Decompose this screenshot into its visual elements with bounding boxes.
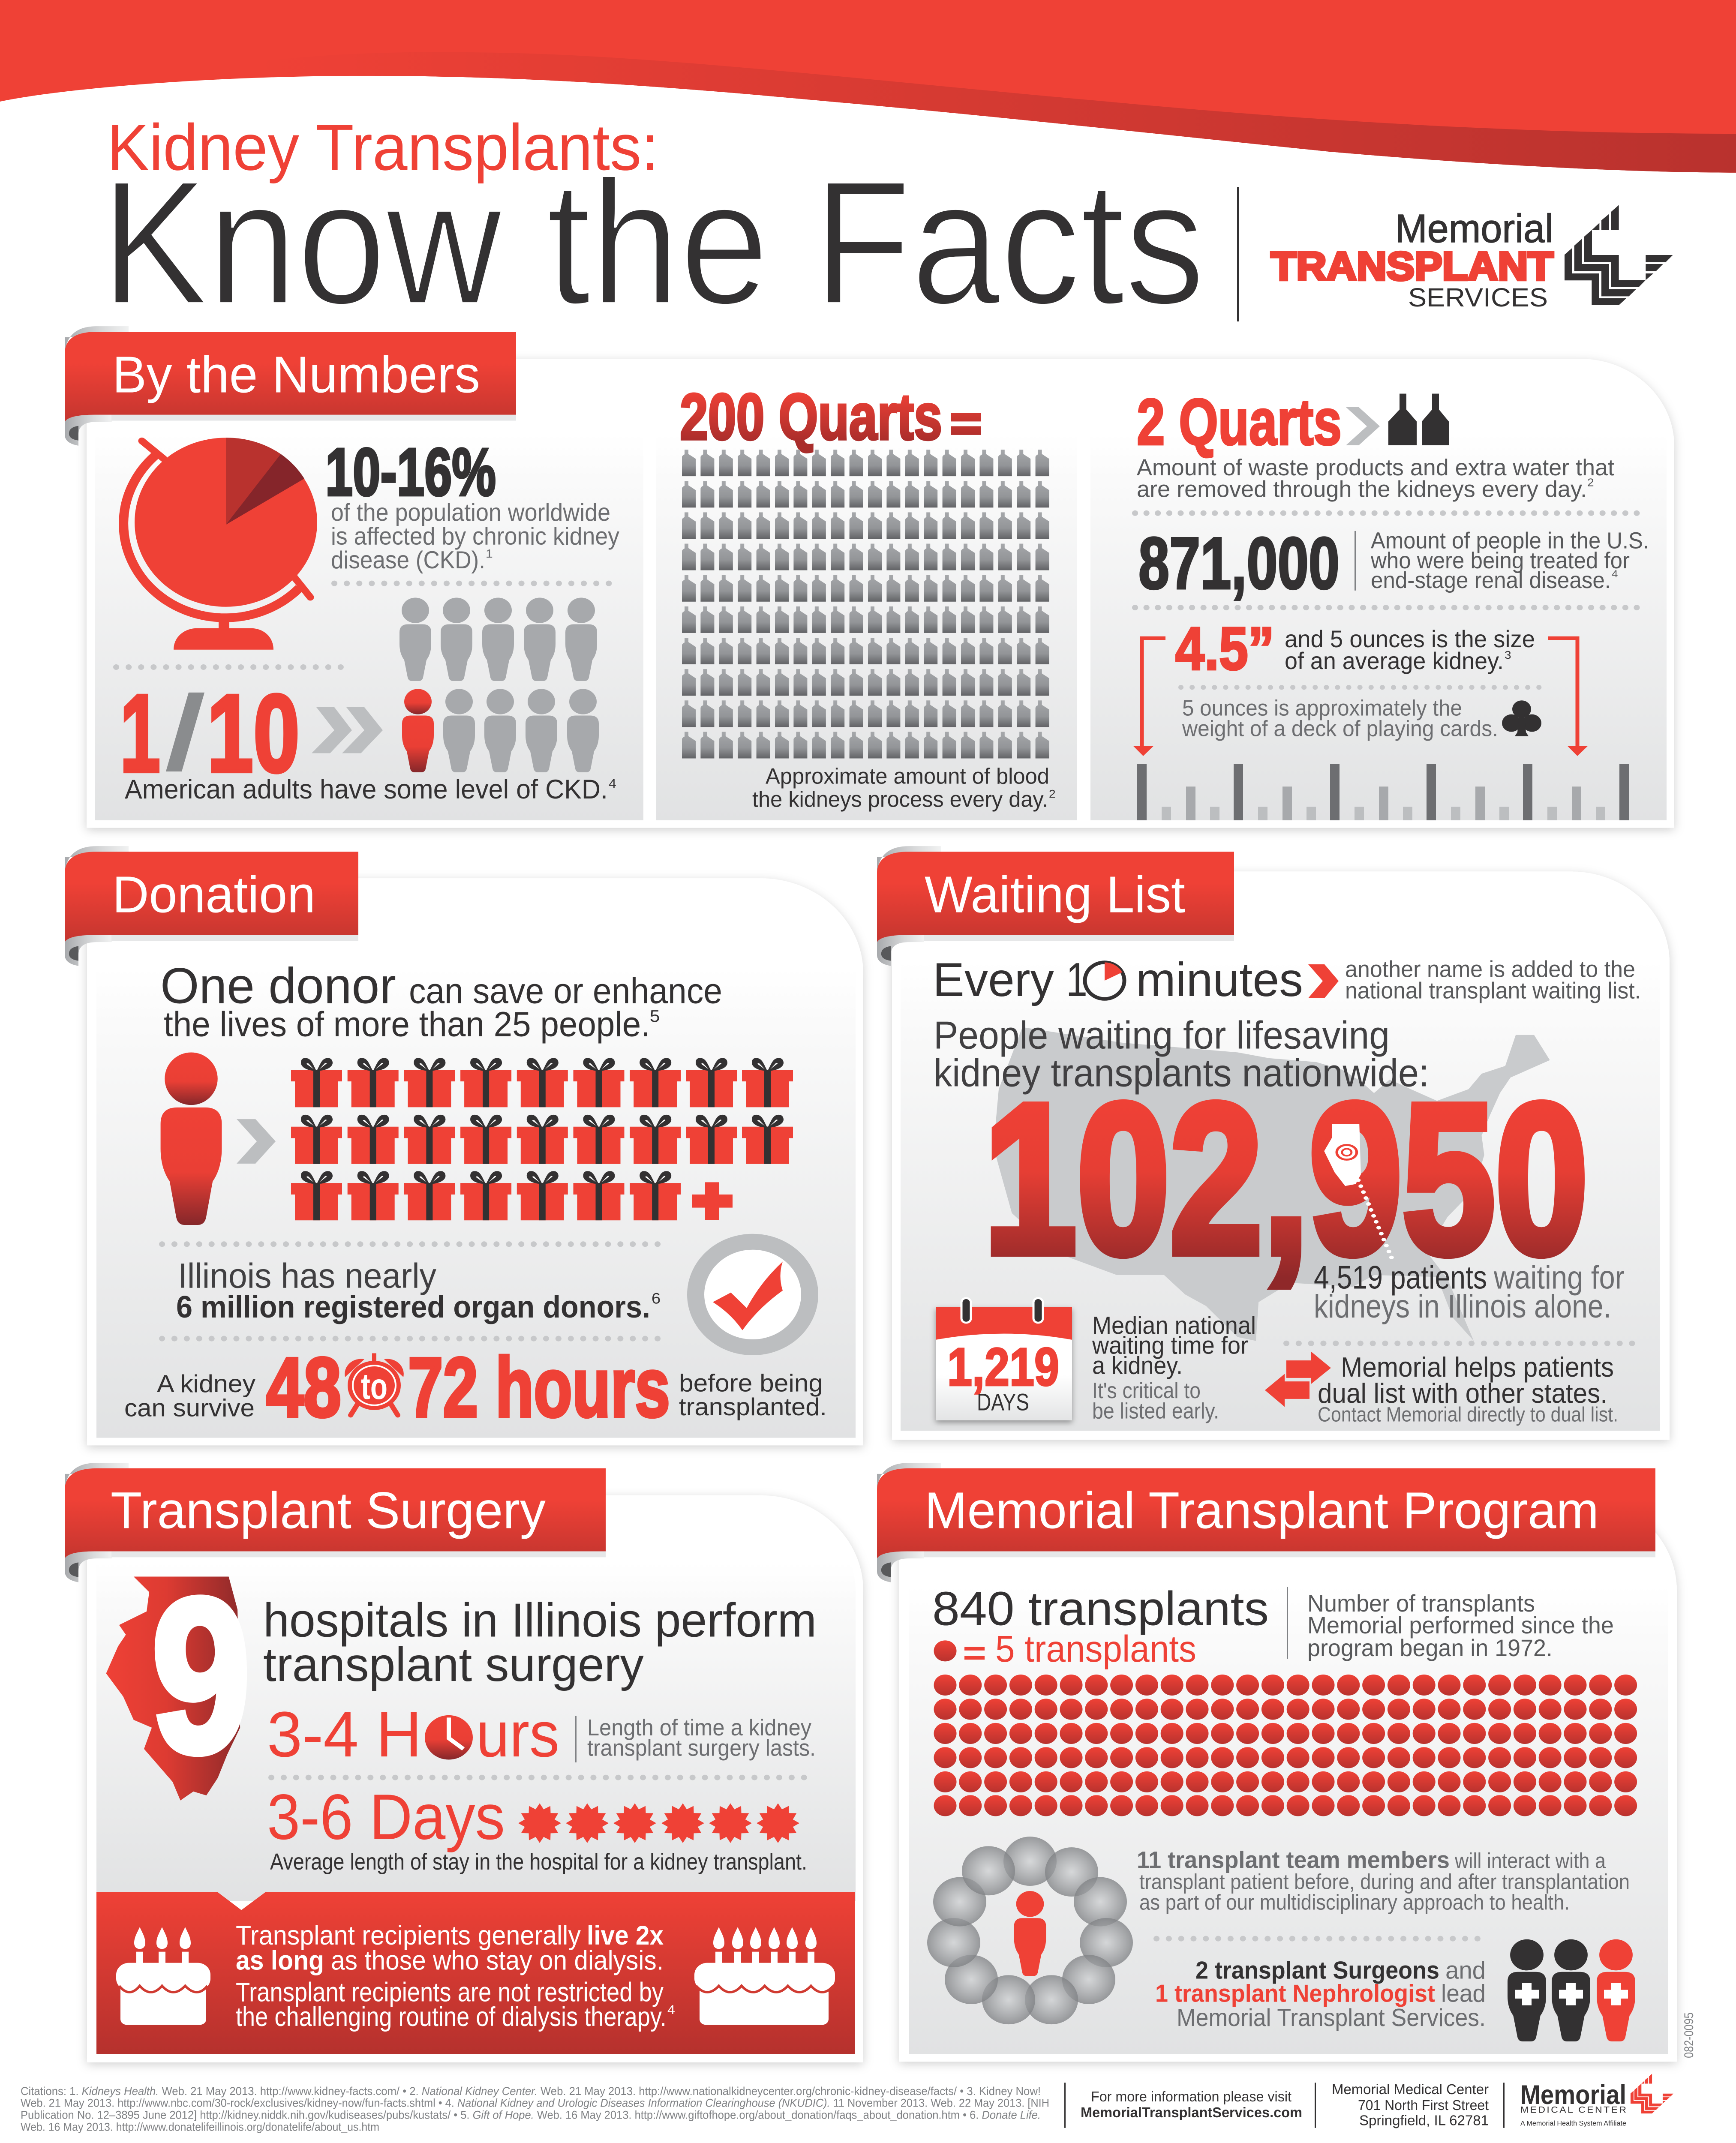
heading: 2 quarts: 2 Quarts <box>1137 385 1342 459</box>
arrow: bracket lines <box>1142 638 1577 748</box>
footer: address: Memorial Medical Center <box>1332 2082 1489 2098</box>
icon: alarm clock: to <box>361 1366 387 1407</box>
stat: 4.5 inches: 4.5” <box>1175 615 1274 683</box>
text: a kidney can survive: can survive <box>124 1394 255 1422</box>
text: one donor: can save or enhance <box>409 971 722 1011</box>
text: dual listing: dual list with other states. <box>1318 1378 1607 1409</box>
footer logo: memorial medical center: MEDICAL CENTER <box>1520 2104 1626 2115</box>
text: team members: transplant patient before, during and after transplantation <box>1139 1870 1630 1894</box>
text: blood processed: Approximate amount of blood <box>766 764 1049 789</box>
icon grid: 168 dots <box>934 1675 1637 1816</box>
text: before being transplanted <box>679 1369 827 1420</box>
icon: check mark <box>696 1242 810 1348</box>
text: median waiting time: be listed early. <box>1092 1399 1219 1423</box>
text: every 10 minutes: Every <box>933 953 1054 1006</box>
ruler <box>1137 764 1629 820</box>
icon: calendar <box>936 1298 1072 1420</box>
text: team members: will interact with a <box>1454 1849 1606 1873</box>
logo: memorial transplant services <box>1271 205 1673 312</box>
text: population affected: is affected by chronic kidney <box>331 522 619 550</box>
text: another name <box>1345 956 1641 1003</box>
text: recipients: Transplant recipients generally <box>236 1920 581 1950</box>
text: kidney size: 3 <box>1505 649 1511 661</box>
icon grid: gifts <box>291 1058 793 1220</box>
icon: calendar: 1,219 <box>947 1337 1059 1397</box>
text: illinois donors: 6 million registered organ donors. <box>176 1290 650 1324</box>
citations: Web. 21 May 2013. http://www.nbc.com/30-rock/exclusives/kidney-now/fun-facts.shtml • 4. National Kidney and Urologic Diseases Information Clearinghouse (NKUDIC). 11 November 2013. Web. 22 May 2013. [NIH <box>21 2097 1049 2110</box>
text: people treated: Amount of people in the U.S. <box>1371 528 1649 553</box>
text: median waiting time: a kidney. <box>1092 1352 1183 1379</box>
text: people waiting <box>934 1014 1429 1095</box>
ribbon: memorial transplant program <box>877 1463 1655 1582</box>
icon: large cake <box>694 1927 835 2025</box>
text: one donor: the lives of more than 25 people. <box>164 1005 650 1044</box>
text: every 10 minutes <box>933 953 1303 1006</box>
text: dual listing: Contact Memorial directly to dual list. <box>1318 1403 1618 1426</box>
text: surgery length <box>587 1714 816 1761</box>
title: kidney transplants: Kidney Transplants: <box>107 111 659 184</box>
text: illinois patients: 4,519 patients <box>1314 1259 1487 1296</box>
text: population affected: of the population worldwide <box>331 498 610 526</box>
text: american adults: 4 <box>609 776 616 791</box>
stat: 3-4 hours: urs <box>476 1699 559 1771</box>
icon: clock as zero <box>1085 962 1124 999</box>
text: deck of cards: weight of a deck of playing cards. <box>1182 716 1498 741</box>
text: team members: 11 transplant team members <box>1137 1847 1450 1873</box>
section: globe and CKD statistics <box>95 366 643 820</box>
section: 200 quarts <box>656 366 1077 820</box>
text: recipients: as those who stay on dialysis. <box>331 1945 664 1975</box>
panel: by the numbers <box>65 326 1674 828</box>
panel: memorial transplant program <box>877 1463 1677 2062</box>
text: another name: another name is added to the <box>1345 956 1635 982</box>
text: illinois patients: kidneys in Illinois alone. <box>1314 1288 1611 1324</box>
text: surgeons and nephrologist: 2 transplant Surgeons <box>1195 1957 1439 1984</box>
icon: dual list arrows <box>1265 1352 1331 1407</box>
stat: 3-6 days: 3-6 Days <box>267 1781 505 1853</box>
footer logo: memorial medical center: Memorial <box>1520 2080 1626 2110</box>
text: number of transplants <box>1307 1591 1614 1661</box>
panel: waiting list <box>877 846 1670 1440</box>
text: number of transplants: Number of transplants <box>1307 1591 1535 1617</box>
text: median waiting time <box>1092 1312 1256 1423</box>
icon: chevron <box>237 1119 276 1164</box>
text: blood processed: the kidneys process every day. <box>752 787 1048 812</box>
ribbon: donation <box>65 846 358 966</box>
text: another name: national transplant waiting list. <box>1345 978 1641 1003</box>
legend: dot equals 5 transplants: 5 transplants <box>995 1628 1196 1670</box>
text: before being transplanted: transplanted. <box>679 1393 827 1420</box>
icon: six bursts <box>518 1803 799 1843</box>
text: average stay: Average length of stay in the hospital for a kidney transplant. <box>270 1849 807 1875</box>
icon: illinois with number 9: 9 <box>152 1554 250 1798</box>
stat: 840 transplants: 840 transplants <box>932 1582 1269 1636</box>
stat: 871,000: 871,000 <box>1138 522 1340 604</box>
text: a kidney can survive <box>124 1370 255 1422</box>
text: kidney size <box>1285 626 1535 675</box>
stat: 3-4 hours <box>267 1699 559 1771</box>
footer: address: 701 North First Street <box>1358 2098 1489 2113</box>
text: recipients <box>236 1920 675 2032</box>
logo: memorial transplant services: SERVICES <box>1408 283 1548 312</box>
text: population affected <box>331 498 619 573</box>
stat: 48 to 72 hours: 48 <box>266 1341 341 1435</box>
text: one donor: One donor <box>160 957 396 1014</box>
text: people treated: 4 <box>1612 568 1618 580</box>
footer: address: Springfield, IL 62781 <box>1359 2113 1489 2128</box>
text: median waiting time: waiting time for <box>1092 1331 1248 1359</box>
text: blood processed <box>752 764 1056 812</box>
text: median waiting time: Median national <box>1092 1312 1256 1339</box>
legend: dot equals 5 transplants <box>934 1628 1196 1670</box>
icon: team ring around patient <box>927 1837 1133 2024</box>
text: people treated <box>1370 528 1649 593</box>
stat: 10-16%: 10-16% <box>325 434 496 510</box>
text: illinois donors <box>176 1256 661 1324</box>
text: people waiting: kidney transplants nationwide: <box>934 1052 1429 1095</box>
text: median waiting time: It's critical to <box>1092 1378 1201 1403</box>
ribbon: by the numbers <box>65 326 516 446</box>
text: waste products: are removed through the kidneys every day. <box>1137 476 1587 502</box>
logo: memorial transplant services: Memorial <box>1395 207 1553 251</box>
text: waste products <box>1137 454 1614 502</box>
text: surgeons and nephrologist: 1 transplant Nephrologist <box>1155 1979 1435 2007</box>
text: population affected: 1 <box>486 547 493 561</box>
logo: memorial transplant services: TRANSPLANT <box>1271 244 1553 288</box>
ribbon: donation: Donation <box>112 866 315 924</box>
icon grid: bottles <box>682 450 1049 758</box>
text: surgeons and nephrologist <box>1155 1957 1486 2031</box>
icon: red chevron <box>1308 964 1339 998</box>
section: 2 quarts and kidney size <box>1090 366 1667 820</box>
text: deck of cards <box>1182 696 1498 741</box>
text: waste products: Amount of waste products and extra water that <box>1137 454 1614 480</box>
ribbon: memorial transplant program: Memorial Transplant Program <box>925 1482 1599 1540</box>
text: surgery length: Length of time a kidney <box>587 1714 811 1741</box>
text: recipients: live 2x <box>587 1920 664 1950</box>
text: kidney size: and 5 ounces is the size <box>1285 626 1535 653</box>
stat: 3-4 hours: 3-4 H <box>267 1699 422 1771</box>
text: dual listing: Memorial helps patients <box>1341 1352 1614 1383</box>
text: surgery length: transplant surgery lasts. <box>587 1735 816 1761</box>
text: hospitals: hospitals in Illinois perform <box>263 1594 817 1647</box>
text: dual listing <box>1318 1352 1618 1426</box>
icon: small cake <box>116 1927 210 2025</box>
text: hospitals: transplant surgery <box>263 1638 644 1691</box>
title: know the facts: Know the Facts <box>101 144 1205 341</box>
icon: globe <box>123 438 317 650</box>
text: recipients: as long <box>236 1945 324 1975</box>
text: recipients: Transplant recipients are not restricted by <box>236 1977 664 2007</box>
ribbon: transplant surgery <box>65 1463 606 1582</box>
text: waste products: 2 <box>1587 476 1594 489</box>
text: people treated: end-stage renal disease. <box>1371 567 1611 593</box>
ribbon: by the numbers: By the Numbers <box>112 346 480 404</box>
icon: illinois marker <box>1324 1124 1392 1260</box>
text: team members: as part of our multidisciplinary approach to health. <box>1139 1891 1570 1915</box>
text: number of transplants: program began in 1972. <box>1307 1635 1553 1661</box>
icon: two bottles <box>1388 394 1449 445</box>
text: team members <box>1137 1847 1630 1915</box>
text: surgeons and nephrologist: and <box>1445 1957 1486 1984</box>
stat: 48 to 72 hours <box>266 1341 670 1435</box>
heading: 200 quarts: 200 Quarts <box>680 380 942 453</box>
citations: Citations: 1. Kidneys Health. Web. 21 May 2013. http://www.kidney-facts.com/ • 2. National Kidney Center. Web. 21 May 2013. http://www.nationalkidneycenter.org/chronic-kidney-disease/facts/ • 3. Kidney Now! <box>21 2085 1041 2098</box>
footer: address <box>1315 2082 1505 2128</box>
text: surgeons and nephrologist: lead <box>1441 1979 1486 2007</box>
text: number of transplants: Memorial performed since the <box>1307 1612 1614 1639</box>
panel: transplant surgery <box>65 1463 863 2062</box>
text: kidney size: of an average kidney. <box>1285 648 1504 675</box>
text: american adults: American adults have some level of CKD. <box>125 774 608 804</box>
ribbon: waiting list: Waiting List <box>925 866 1185 924</box>
text: people waiting: People waiting for lifesaving <box>934 1014 1390 1057</box>
footer: more information <box>1064 2083 1302 2128</box>
citations: Web. 16 May 2013. http://www.donatelifeillinois.org/donatelife/about_us.htm <box>21 2120 379 2133</box>
panel: donation <box>65 846 863 1445</box>
icon: chevron <box>1346 407 1380 445</box>
text: population affected: disease (CKD). <box>331 546 485 573</box>
map: united states <box>994 1027 1550 1341</box>
text: illinois donors: 6 <box>652 1290 661 1307</box>
text: surgeons and nephrologist: Memorial Transplant Services. <box>1177 2004 1486 2031</box>
icon: donor person <box>161 1052 222 1225</box>
text: recipients: the challenging routine of dialysis therapy. <box>236 2002 667 2032</box>
icon: three physicians <box>1508 1939 1635 2041</box>
stat: 48 to 72 hours: 72 hours <box>408 1341 670 1435</box>
text: a kidney can survive: A kidney <box>157 1370 255 1398</box>
icon: ten people, one highlighted <box>399 597 599 772</box>
job number: 082-0095 <box>1682 2012 1696 2058</box>
text: before being transplanted: before being <box>679 1369 823 1397</box>
icon: club <box>1502 700 1541 736</box>
citations <box>21 2085 1049 2133</box>
icon: alarm clock <box>345 1353 404 1415</box>
text: recipients: 4 <box>667 2002 675 2017</box>
text: one donor <box>160 957 722 1044</box>
footer logo: memorial medical center: A Memorial Health System Affiliate <box>1520 2119 1626 2127</box>
stat: 1/10 <box>120 672 300 795</box>
header divider <box>1237 187 1239 321</box>
text: illinois patients: waiting for <box>1493 1259 1625 1296</box>
icon: clock <box>425 1715 473 1760</box>
icon: illinois with number 9 <box>106 1554 250 1801</box>
text: deck of cards: 5 ounces is approximately the <box>1182 696 1462 720</box>
footer: more information: For more information please visit <box>1091 2089 1291 2104</box>
citations: Publication No. 12–3895 June 2012] http://kidney.niddk.nih.gov/kudiseases/pubs/kustats/ • 5. Gift of Hope. Web. 16 May 2013. http://www.giftofhope.org/about_donation/faqs_about_donation.htm • 6. Donate Life. <box>21 2108 1041 2121</box>
arrowheads <box>1133 746 1588 756</box>
ribbon: transplant surgery: Transplant Surgery <box>111 1482 546 1540</box>
header wave <box>0 0 1736 173</box>
text: illinois donors: Illinois has nearly <box>178 1256 437 1295</box>
stat: 1/10: 10 <box>207 672 300 795</box>
icon: calendar: DAYS <box>977 1390 1029 1416</box>
ribbon: waiting list <box>877 846 1234 966</box>
callout: live longer <box>96 1892 855 2054</box>
stat: 1/10: 1 <box>120 672 160 795</box>
footer logo: memorial medical center <box>1520 2074 1673 2127</box>
text: every 10 minutes: 1 <box>1066 953 1087 1006</box>
text: one donor: 5 <box>650 1007 660 1026</box>
text: blood processed: 2 <box>1049 788 1056 800</box>
icon: double chevron <box>312 707 383 753</box>
text: hospitals <box>263 1594 817 1691</box>
footer: more information: MemorialTransplantServices.com <box>1081 2105 1302 2121</box>
text: people treated: who were being treated for <box>1370 547 1630 573</box>
text: illinois patients <box>1314 1259 1625 1324</box>
text: every 10 minutes: minutes <box>1136 953 1303 1006</box>
